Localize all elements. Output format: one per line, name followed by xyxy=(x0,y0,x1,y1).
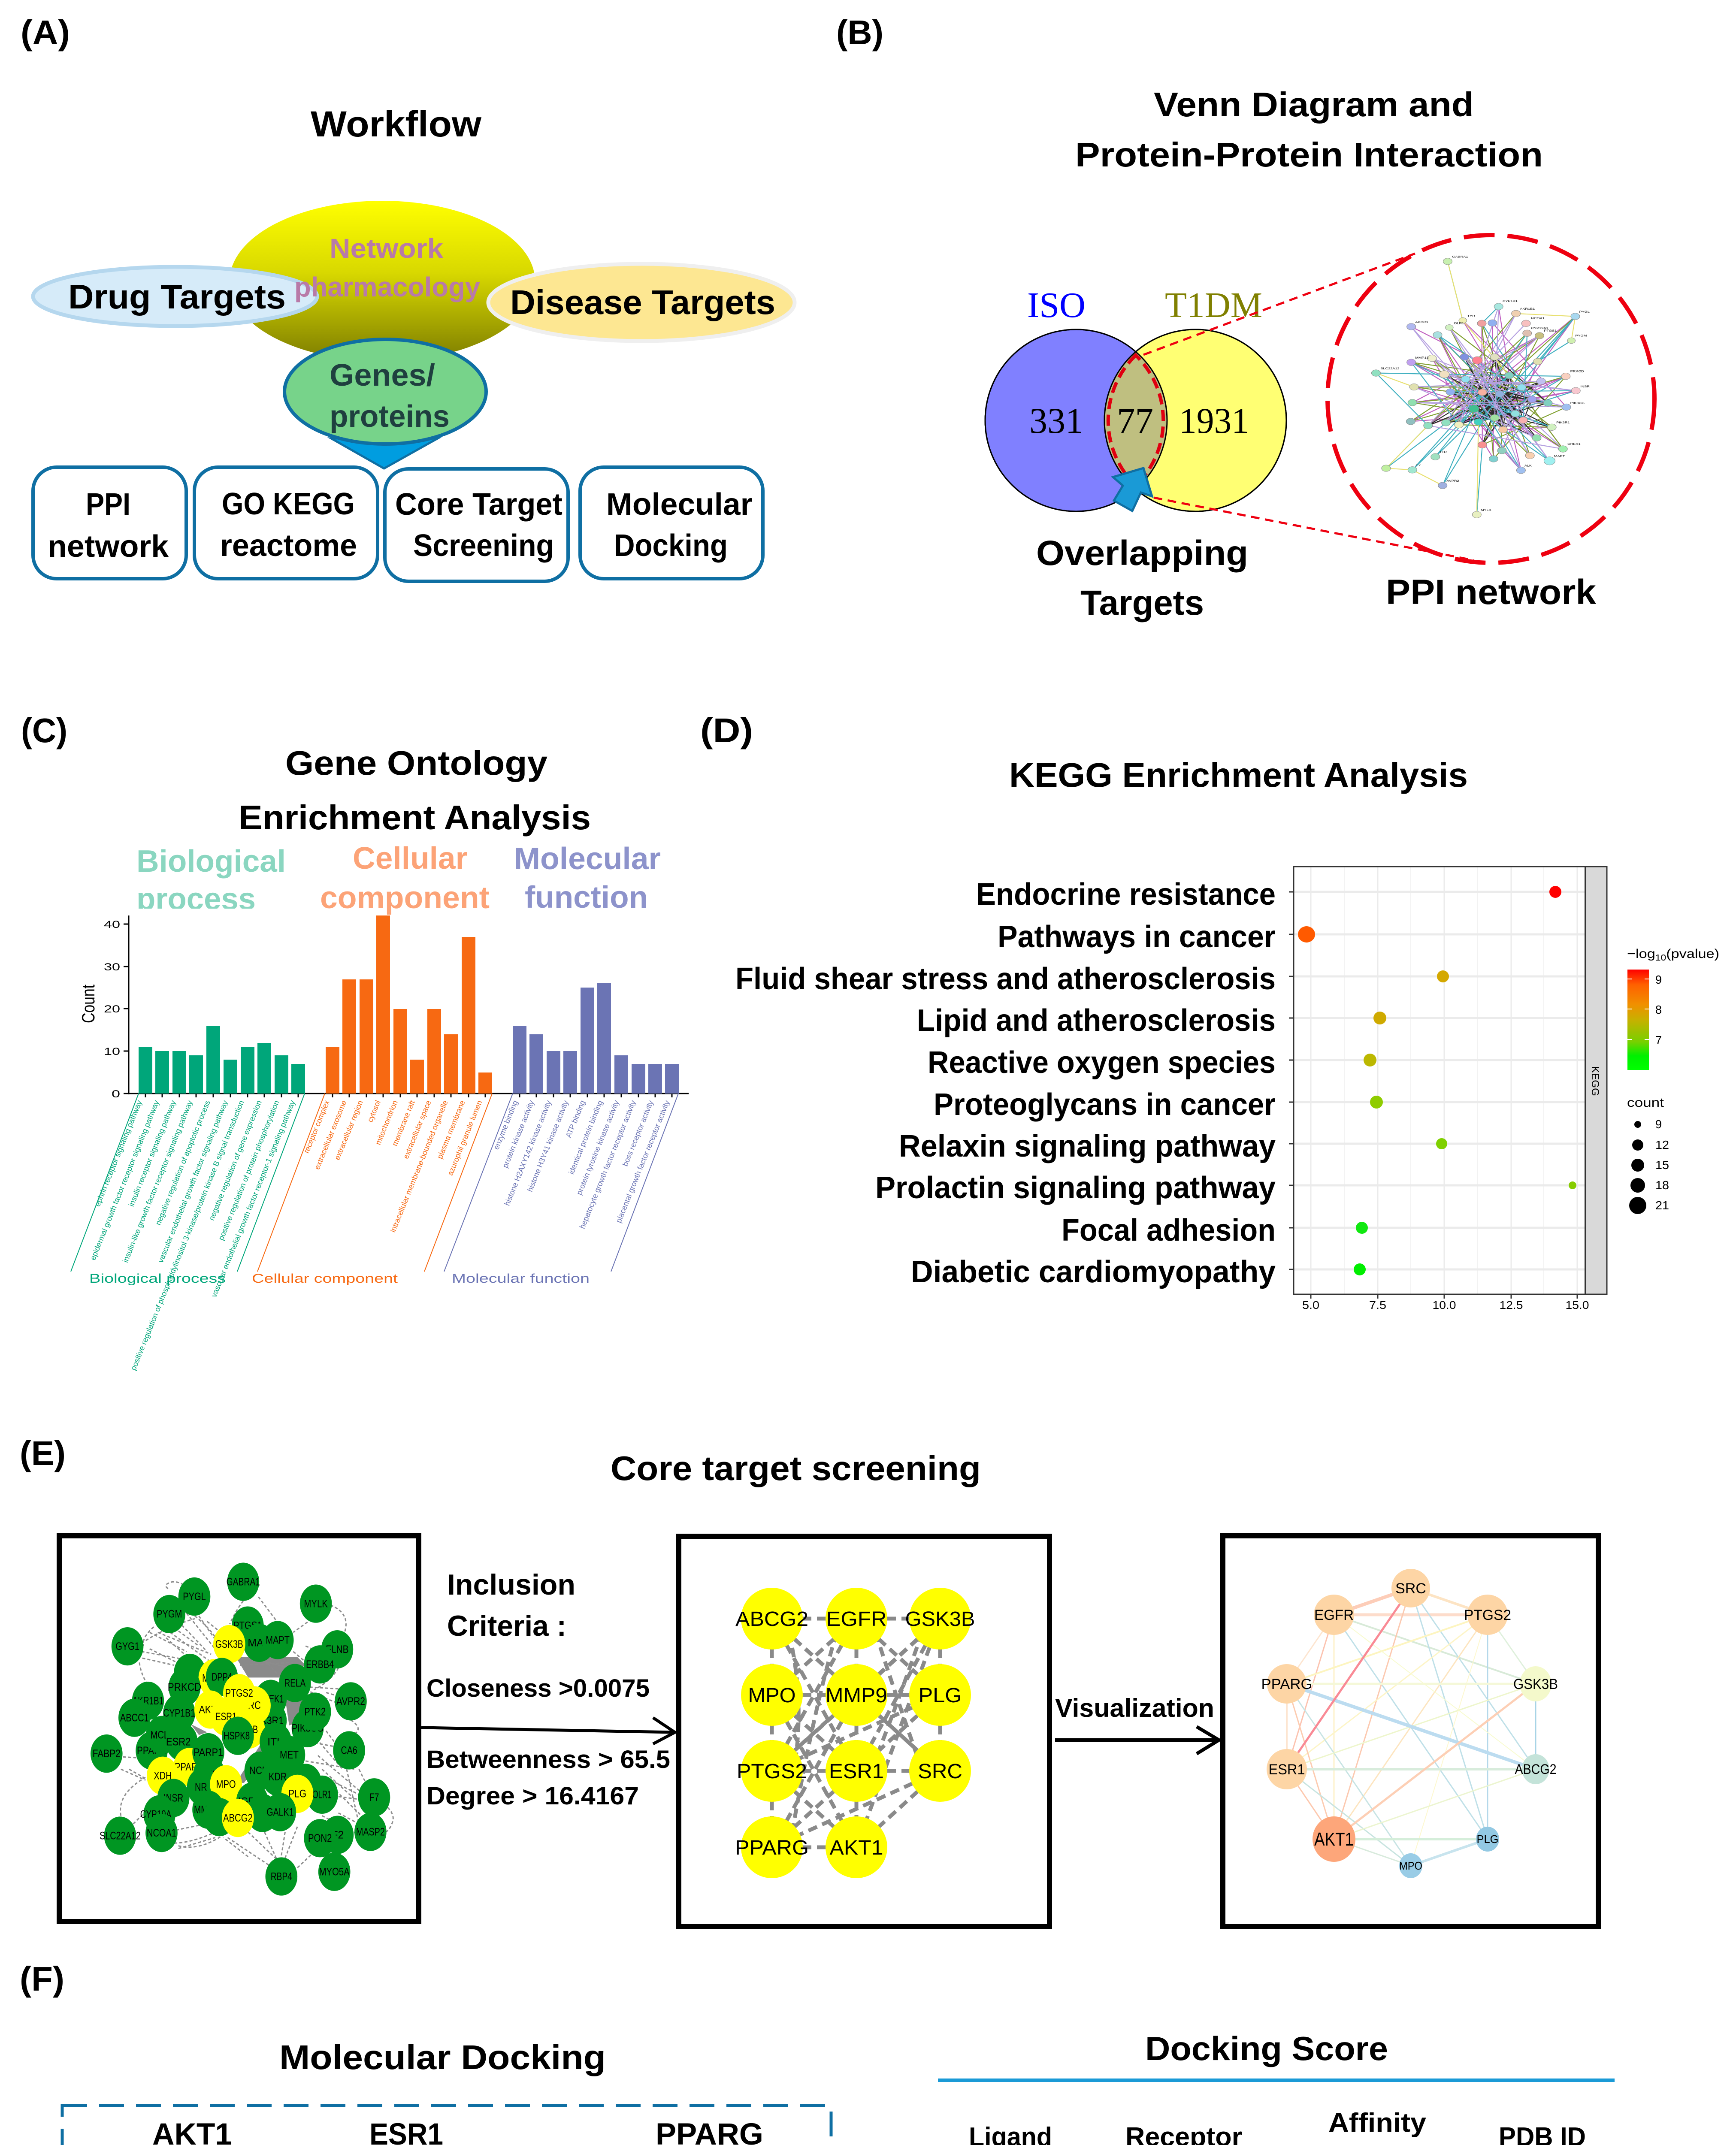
molecular function term labels: enzyme binding xyxy=(492,1099,520,1151)
panel E: core target screening xyxy=(20,1434,1598,1927)
genes/proteins ellipse: Genes/ xyxy=(330,358,435,393)
full network graph: MMP9 xyxy=(202,1672,227,1684)
category title: Molecular function xyxy=(514,842,661,915)
molecular function term labels: hepatocyte growth factor receptor activity xyxy=(578,1099,638,1230)
category bracket lines: cellular xyxy=(257,1094,492,1272)
full network graph: AKT1 xyxy=(199,1704,222,1716)
bar chart axes: 10 xyxy=(104,1046,120,1057)
full network graph: PTGS2 xyxy=(225,1687,253,1699)
box: Molecular Docking xyxy=(580,467,763,579)
biological process term labels: insulin-like growth factor receptor signaling pathway xyxy=(121,1099,194,1264)
box: Core Target Screening: Screening xyxy=(413,529,554,563)
full network graph: ESR2 xyxy=(166,1736,191,1748)
heading: Docking Score: Docking Score xyxy=(1145,2030,1388,2067)
full network graph: PTGS1 xyxy=(233,1619,262,1631)
pathway labels: Focal adhesion xyxy=(1062,1213,1276,1248)
pathway labels: Relaxin signaling pathway xyxy=(899,1129,1276,1163)
box: Molecular Docking: Molecular xyxy=(606,487,753,522)
network pharmacology text: pharmacology xyxy=(294,272,480,302)
core targets nodes: EGFR xyxy=(826,1608,886,1631)
panel label C: (C) xyxy=(21,711,67,749)
full network graph: PPARA xyxy=(137,1744,166,1756)
network pharmacology ellipse xyxy=(230,201,535,361)
bar chart axes: 40 xyxy=(104,919,120,931)
cellular component term labels: intracellular membrane-bounded organelle xyxy=(389,1099,450,1233)
PPI network: PYGL xyxy=(1579,310,1590,314)
circular network nodes: GSK3B xyxy=(1513,1676,1558,1692)
PPI network: CHEK1 xyxy=(1567,442,1581,446)
pathway labels: Reactive oxygen species xyxy=(928,1045,1276,1080)
set label T1DM: T1DM xyxy=(1165,285,1262,325)
category title: Molecular function: Molecular xyxy=(514,842,661,876)
genes/proteins ellipse: proteins xyxy=(330,399,450,434)
size legend: 12 xyxy=(1655,1138,1669,1151)
full network graph: CA6 xyxy=(341,1744,357,1756)
full network graph: PYGL xyxy=(183,1590,206,1602)
biological process term labels xyxy=(88,1099,297,1372)
PPI network: OLR1 xyxy=(1454,322,1464,325)
PPI network: TYR xyxy=(1467,314,1475,317)
PPI network: AVPR2 xyxy=(1446,479,1459,483)
category bracket lines: molecular xyxy=(444,1094,678,1272)
box: GO KEGG reactome xyxy=(194,467,378,579)
category title: Biological process: process xyxy=(136,882,256,916)
betweenness and degree criteria: Degree > 16.4167 xyxy=(426,1782,639,1810)
pathway labels: Lipid and atherosclerosis xyxy=(917,1003,1276,1038)
full network graph: PPARG xyxy=(175,1761,204,1773)
PPI network: CYP19A1 xyxy=(1531,326,1548,330)
full network graph: AKR1B1 xyxy=(133,1695,163,1707)
PPI network: F7 xyxy=(1416,463,1421,466)
core targets nodes: MMP9 xyxy=(826,1684,887,1707)
full network graph: RELA xyxy=(284,1677,306,1689)
colour legend: 7 xyxy=(1655,1033,1662,1047)
category title: Biological process xyxy=(136,844,286,916)
pathway labels: Diabetic cardiomyopathy xyxy=(911,1255,1276,1289)
arrow: visualization xyxy=(1055,1727,1219,1754)
molecular function term labels: histone H3Y41 kinase activity xyxy=(526,1099,570,1193)
panel label E: (E) xyxy=(20,1434,66,1472)
box: GO KEGG reactome: reactome xyxy=(220,529,357,563)
box: circular network xyxy=(1223,1536,1598,1927)
circular network nodes: AKT1 xyxy=(1314,1829,1354,1850)
cellular component term labels: extracellular exosome xyxy=(313,1099,348,1171)
full network graph: F2 xyxy=(331,1829,344,1841)
PPI network: MAPT xyxy=(1554,455,1565,458)
heading: KEGG Enrichment Analysis: KEGG Enrichment Analysis xyxy=(1009,756,1468,794)
network pharmacology text: Network xyxy=(330,233,443,264)
panel D: KEGG enrichment xyxy=(700,711,1719,1311)
box: core targets xyxy=(679,1536,1049,1927)
category title: Biological process: Biological xyxy=(136,844,286,879)
molecular function term labels: placental growth factor receptor activity xyxy=(614,1099,671,1224)
colour legend: 9 xyxy=(1655,973,1662,986)
PPI network: PIK3R1 xyxy=(1556,421,1570,424)
full network graph: ITK xyxy=(267,1736,284,1748)
PPI network: GABRA1 xyxy=(1452,255,1468,258)
full network graph: MASP2 xyxy=(356,1826,385,1838)
colour legend: −log xyxy=(1627,947,1652,961)
arrow: blue overlap pointer xyxy=(1113,468,1152,511)
full network graph: ESR1 xyxy=(215,1710,237,1722)
pathway labels: Proteoglycans in cancer xyxy=(934,1088,1276,1122)
receptor names xyxy=(148,2118,763,2145)
core targets nodes: PPARG xyxy=(735,1837,809,1859)
pathway labels: Endocrine resistance xyxy=(976,877,1276,912)
inclusion criteria heading: Inclusion xyxy=(447,1568,575,1601)
category footer labels: Cellular component xyxy=(252,1272,398,1286)
biological process term labels: vascular endothelial growth factor receptor-1 signaling pathway xyxy=(209,1099,297,1299)
full network graph: FLNB xyxy=(326,1643,349,1655)
full network graph: CYP1B1 xyxy=(163,1707,195,1719)
full network graph: PTK2 xyxy=(304,1706,326,1718)
full network graph: CHEK1 xyxy=(257,1693,284,1705)
category footer labels xyxy=(89,1272,590,1286)
molecular function term labels: ATP binding xyxy=(564,1099,587,1139)
box: PPI network: PPI xyxy=(86,487,130,522)
cellular component term labels: receptor complex xyxy=(302,1099,331,1154)
core targets nodes: MPO xyxy=(748,1684,795,1707)
panel label A: (A) xyxy=(21,13,70,51)
box: Molecular Docking: Docking xyxy=(614,529,728,563)
circular network edges xyxy=(1287,1588,1536,1866)
panel F: molecular docking xyxy=(20,1960,1615,2145)
category footer labels: Biological process xyxy=(89,1272,226,1286)
heading: Venn Diagram and Protein-Protein Interaction: Venn Diagram and xyxy=(1154,85,1474,124)
box: Core Target Screening: Core Target xyxy=(395,487,563,522)
circular network nodes xyxy=(1261,1569,1558,1878)
PPI network: ALK xyxy=(1524,464,1532,467)
box: full network xyxy=(59,1536,419,1921)
size legend: 21 xyxy=(1655,1199,1669,1212)
biological process term labels: positive regulation of protein phosphorylation xyxy=(217,1099,281,1242)
molecular function term labels: protein tyrosine kinase activity xyxy=(575,1099,621,1196)
arrow: criteria filter xyxy=(421,1718,675,1744)
full network graph: NCOA1 xyxy=(147,1827,176,1839)
arrow: down triangle xyxy=(331,438,438,468)
molecular function term labels: boss receptor activity xyxy=(621,1099,655,1168)
full network graph: HSPK8 xyxy=(224,1730,250,1742)
full network graph: PIK3R1 xyxy=(252,1714,284,1726)
size legend: 15 xyxy=(1655,1158,1669,1172)
category bracket lines xyxy=(71,1094,305,1272)
biological process term labels: positive regulation of phosphatidylinositol 3-kinase/protein kinase B signal transduction xyxy=(129,1099,246,1372)
full network graph: SLC22A12 xyxy=(100,1830,141,1842)
PPI network: AKR1B1 xyxy=(1520,307,1535,311)
PPI network: ABCC1 xyxy=(1415,320,1428,324)
biological process term labels: ephrin receptor signaling pathway xyxy=(93,1099,144,1208)
dot plot xyxy=(1289,867,1607,1311)
full network graph: MAP xyxy=(248,1637,271,1649)
colour legend: 8 xyxy=(1655,1003,1662,1016)
label: PPI network: PPI network xyxy=(1386,573,1596,612)
heading: Gene Ontology Enrichment Analysis: Enrichment Analysis xyxy=(239,798,591,837)
box: PPI network: network xyxy=(48,529,169,564)
box: PPI network xyxy=(33,467,186,579)
full network graph: NCF xyxy=(249,1764,267,1776)
size legend: count xyxy=(1627,1096,1664,1110)
colour legend xyxy=(1627,947,1719,1070)
bars: biological process xyxy=(139,1026,305,1097)
PPI network xyxy=(1372,255,1590,518)
full network graph: PARP1 xyxy=(194,1746,223,1758)
panel label F: (F) xyxy=(20,1960,64,1998)
core targets nodes: ESR1 xyxy=(829,1760,884,1783)
disease targets ellipse: Disease Targets xyxy=(510,283,775,321)
cellular component term labels: azurophil granule lumen xyxy=(446,1099,484,1177)
Venn diagram: 1931 xyxy=(1179,401,1249,441)
PPI network: PYGM xyxy=(1575,334,1587,337)
dot plot: 12.5 xyxy=(1499,1299,1523,1311)
core targets nodes xyxy=(735,1588,975,1878)
set label ISO: ISO xyxy=(1027,285,1086,325)
core targets nodes: GSK3B xyxy=(905,1608,975,1631)
full network graph: SRC xyxy=(242,1699,261,1711)
panel A: workflow xyxy=(21,13,795,581)
closeness criterion: Closeness >0.0075 xyxy=(426,1674,650,1702)
full network graph: RBP4 xyxy=(271,1870,292,1882)
full network graph: PLG xyxy=(288,1788,306,1800)
pathway labels xyxy=(735,877,1276,1289)
core targets edges xyxy=(772,1619,940,1847)
full network graph: F7 xyxy=(369,1791,379,1803)
full network graph: CYP19A xyxy=(140,1808,172,1820)
PPI network: MYLK xyxy=(1481,508,1492,512)
full network graph: MMP xyxy=(201,1768,218,1781)
full network graph: INSR xyxy=(163,1792,183,1804)
heading: Workflow: Workflow xyxy=(311,104,482,144)
full network graph: GYG1 xyxy=(115,1640,139,1652)
full network graph xyxy=(91,1562,393,1896)
bar chart axes: 0 xyxy=(112,1088,120,1100)
circular network nodes: SRC xyxy=(1395,1580,1426,1597)
biological process term labels: vascular endothelial growth factor signaling pathway xyxy=(156,1099,230,1264)
Venn diagram: 331 xyxy=(1029,401,1083,441)
PPI network: MMP13 xyxy=(1415,356,1429,360)
full network graph: OLR1 xyxy=(312,1789,331,1801)
full network graph: PYGM xyxy=(157,1608,182,1620)
heading: Gene Ontology Enrichment Analysis: Gene Ontology xyxy=(285,744,548,782)
visualization label: Visualization xyxy=(1055,1694,1214,1722)
bar chart axes: 20 xyxy=(104,1003,120,1015)
PPI network: PTGS1 xyxy=(1544,329,1557,332)
core targets nodes: AKT1 xyxy=(830,1837,883,1859)
red dashed zoom lines xyxy=(1143,254,1474,560)
core targets nodes: PLG xyxy=(918,1684,962,1707)
label: Overlapping Targets xyxy=(1036,534,1248,622)
category title: Cellular component xyxy=(320,841,490,915)
bar chart axes xyxy=(78,915,689,1100)
category title: Cellular component: Cellular xyxy=(353,841,468,876)
cellular component term labels: extracellular space xyxy=(402,1099,433,1160)
heading: Molecular Docking: Molecular Docking xyxy=(279,2038,606,2076)
Venn diagram: 77 xyxy=(1117,401,1153,441)
full network graph: MMP13 xyxy=(194,1804,223,1816)
category title: Molecular function: function xyxy=(525,880,648,915)
PPI network: CYP1B1 xyxy=(1503,299,1518,303)
circular network nodes: PPARG xyxy=(1261,1676,1312,1692)
circular network nodes: MPO xyxy=(1399,1859,1422,1872)
heading: Core target screening: Core target screening xyxy=(611,1449,981,1487)
full network graph: KDR xyxy=(269,1770,287,1783)
dot plot: 5.0 xyxy=(1302,1299,1319,1311)
biological process term labels: epidermal growth factor receptor signaling pathway xyxy=(88,1099,161,1261)
size legend xyxy=(1627,1096,1669,1214)
network pharmacology text xyxy=(294,233,480,302)
drug targets ellipse: Drug Targets xyxy=(68,278,286,316)
full network graph: ABCC1 xyxy=(120,1712,149,1724)
dot plot: 7.5 xyxy=(1369,1299,1386,1311)
circular network nodes: ABCG2 xyxy=(1515,1761,1557,1777)
pathway labels: Pathways in cancer xyxy=(998,920,1276,954)
inclusion criteria heading xyxy=(447,1568,575,1642)
betweenness and degree criteria xyxy=(426,1746,670,1810)
core targets nodes: SRC xyxy=(918,1760,962,1783)
molecular function term labels xyxy=(492,1099,671,1230)
full network graph: PIK3CG xyxy=(292,1722,324,1734)
full network graph: ABCG2 xyxy=(223,1812,253,1824)
cellular component term labels: cytosol xyxy=(366,1099,382,1124)
cellular component term labels: mitochondrion xyxy=(374,1099,399,1146)
category title: Cellular component: component xyxy=(320,881,490,915)
full network graph: MAPT xyxy=(266,1634,290,1646)
genes/proteins ellipse xyxy=(284,339,486,444)
molecular function term labels: protein kinase activity xyxy=(501,1099,536,1169)
cellular component term labels xyxy=(302,1099,484,1233)
label: Overlapping Targets: Targets xyxy=(1080,583,1204,622)
bars: cellular component xyxy=(326,915,492,1097)
dot plot: KEGG xyxy=(1589,1066,1601,1096)
circular network nodes: PTGS2 xyxy=(1464,1607,1511,1623)
biological process term labels: negative regulation of apoptotic process xyxy=(154,1099,212,1227)
cellular component term labels: plasma membrane xyxy=(436,1099,467,1160)
full network graph: MET xyxy=(280,1749,299,1761)
size legend: 9 xyxy=(1655,1118,1662,1131)
PPI network: NCOA1 xyxy=(1531,317,1545,320)
circular network nodes: EGFR xyxy=(1314,1607,1354,1623)
circular network nodes: PLG xyxy=(1477,1833,1498,1846)
full network graph: NR xyxy=(195,1781,207,1793)
docking score table: Affinity xyxy=(1328,2108,1427,2138)
full network graph: DPP4 xyxy=(212,1671,232,1683)
panel label B: (B) xyxy=(836,13,883,51)
full network graph: ERBB4 xyxy=(306,1658,334,1671)
inclusion criteria heading: Criteria : xyxy=(447,1610,566,1642)
cellular component term labels: membrane raft xyxy=(390,1099,417,1147)
full network graph: PRKCD xyxy=(168,1681,201,1693)
box: Core Target Screening xyxy=(385,469,568,581)
full network graph: IGF1R xyxy=(238,1795,266,1807)
PPI network: SLC22A12 xyxy=(1380,367,1400,370)
biological process term labels: negative regulation of gene expression xyxy=(207,1099,263,1222)
full network graph: XDH xyxy=(154,1770,172,1782)
heading: Venn Diagram and Protein-Protein Interaction: Protein-Protein Interaction xyxy=(1075,136,1543,174)
colour legend: (pvalue) xyxy=(1666,947,1719,961)
drug targets ellipse xyxy=(33,267,317,326)
pathway labels: Prolactin signaling pathway xyxy=(875,1171,1276,1205)
full network graph: GALK1 xyxy=(266,1806,293,1818)
disease targets ellipse xyxy=(488,264,795,341)
red dashed zoom circle xyxy=(1328,235,1654,563)
molecular function term labels: histone H2AXY142 kinase activity xyxy=(503,1099,553,1207)
full network graph: MYO5A xyxy=(319,1866,350,1878)
betweenness and degree criteria: Betweenness > 65.5 xyxy=(426,1746,670,1773)
core targets nodes: ABCG2 xyxy=(735,1608,808,1631)
PPI network: TTR xyxy=(1439,450,1447,454)
full network graph: MYLK xyxy=(304,1598,328,1610)
box: GO KEGG reactome: GO KEGG xyxy=(222,487,355,521)
size legend: 18 xyxy=(1655,1178,1669,1192)
full network graph: PON2 xyxy=(308,1832,332,1844)
bars: molecular function xyxy=(513,983,679,1097)
PPI network: INSR xyxy=(1580,385,1590,388)
full network graph: MCL1 xyxy=(151,1729,173,1741)
full network graph: GSK3B xyxy=(215,1638,243,1650)
label: Overlapping Targets: Overlapping xyxy=(1036,534,1248,573)
Venn diagram xyxy=(985,329,1286,511)
full network graph: AVPR2 xyxy=(336,1695,365,1707)
full network graph: GSK3B xyxy=(232,1723,258,1735)
dot plot: 10.0 xyxy=(1432,1299,1456,1311)
circular network nodes: ESR1 xyxy=(1268,1761,1305,1778)
panel B: Venn diagram and PPI xyxy=(836,13,1654,622)
full network graph: FABP2 xyxy=(93,1747,121,1759)
biological process term labels: insulin receptor signaling pathway xyxy=(127,1099,178,1208)
bar chart axes: Count xyxy=(78,985,98,1023)
full network graph: MPO xyxy=(216,1778,236,1790)
molecular function term labels: identical protein binding xyxy=(567,1099,605,1175)
full network graph: GABRA1 xyxy=(227,1576,260,1588)
core targets nodes: PTGS2 xyxy=(737,1760,807,1783)
cellular component term labels: extracellular region xyxy=(333,1099,365,1161)
colour legend: 10 xyxy=(1655,953,1666,963)
PPI network: PRKCD xyxy=(1570,370,1584,373)
category footer labels: Molecular function xyxy=(452,1272,590,1286)
PPI network: PIK3CG xyxy=(1570,401,1585,405)
dot plot: 15.0 xyxy=(1565,1299,1589,1311)
pathway labels: Fluid shear stress and atherosclerosis xyxy=(735,962,1276,996)
red dashed overlap outline xyxy=(1108,355,1163,486)
panel C: Gene Ontology enrichment xyxy=(21,711,689,1372)
heading: Gene Ontology Enrichment Analysis xyxy=(239,744,591,837)
panel label D: (D) xyxy=(700,711,753,749)
bar chart axes: 30 xyxy=(104,961,120,973)
heading: Venn Diagram and Protein-Protein Interaction xyxy=(1075,85,1543,174)
docking score table xyxy=(938,2080,1615,2145)
dashed docking frame xyxy=(62,2106,831,2145)
